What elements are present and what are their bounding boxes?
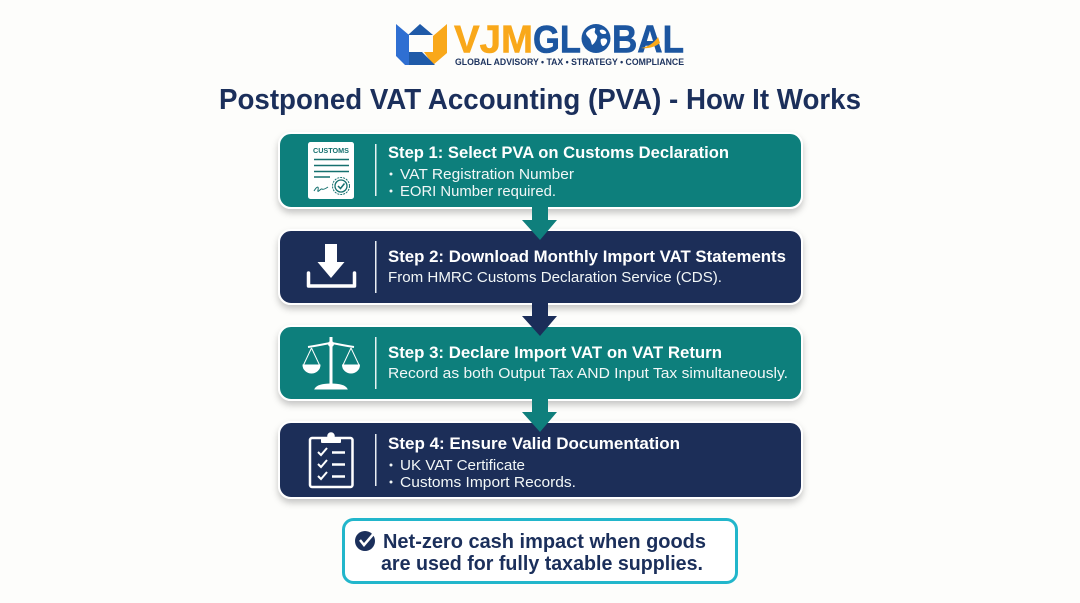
logo: VJM Global [396, 18, 684, 68]
icon: download [308, 244, 354, 286]
icon: logo mark [396, 24, 447, 65]
step 2 heading: Step 2: Download Monthly Import VAT Statements [388, 247, 786, 266]
panel: step 4 [279, 422, 802, 498]
logo swoosh [641, 37, 660, 48]
step 3 details: Record as both Output Tax AND Input Tax simultaneously. [388, 366, 788, 382]
icon: check badge [355, 531, 376, 551]
step 1 details [390, 167, 574, 200]
icon: scales [303, 337, 360, 389]
step 4 details [390, 458, 576, 491]
logo wordmark: VJM [454, 18, 533, 62]
arrow: step 3 to step 4 [522, 399, 557, 432]
callout text: Net-zero cash impact when goods [383, 531, 706, 553]
icon: customs document: CUSTOMS [313, 146, 349, 155]
step 4 heading: Step 4: Ensure Valid Documentation [388, 434, 680, 453]
step 4 details: Customs Import Records. [400, 475, 576, 491]
icon: checklist clipboard [310, 432, 352, 487]
step 2 details: From HMRC Customs Declaration Service (CDS). [388, 270, 722, 286]
panel: step 3 [279, 326, 802, 400]
panel: step 2 [279, 230, 802, 304]
icon: globe letter O [582, 24, 610, 53]
callout text [381, 531, 706, 575]
step 1 heading: Step 1: Select PVA on Customs Declaration [388, 143, 729, 162]
logo tagline: GLOBAL ADVISORY • TAX • STRATEGY • COMPLIANCE [455, 57, 684, 68]
logo wordmark [454, 18, 684, 62]
callout text: are used for fully taxable supplies. [381, 553, 703, 575]
logo wordmark: GL [533, 18, 581, 62]
icon: customs document [308, 142, 354, 199]
divider [375, 144, 376, 196]
logo wordmark: BAL [612, 18, 684, 62]
arrow: step 1 to step 2 [522, 207, 557, 240]
arrow: step 2 to step 3 [522, 303, 557, 336]
panel: step 1 [279, 133, 802, 208]
title: Postponed VAT Accounting (PVA) - How It Works [219, 84, 861, 116]
callout: net-zero cash impact [344, 520, 736, 582]
step 1 details: VAT Registration Number [400, 167, 574, 183]
step 3 heading: Step 3: Declare Import VAT on VAT Return [388, 343, 722, 362]
divider [375, 241, 376, 293]
step 4 details: UK VAT Certificate [400, 458, 525, 474]
divider [375, 337, 376, 389]
step 1 details: EORI Number required. [400, 184, 556, 200]
divider [375, 434, 376, 486]
